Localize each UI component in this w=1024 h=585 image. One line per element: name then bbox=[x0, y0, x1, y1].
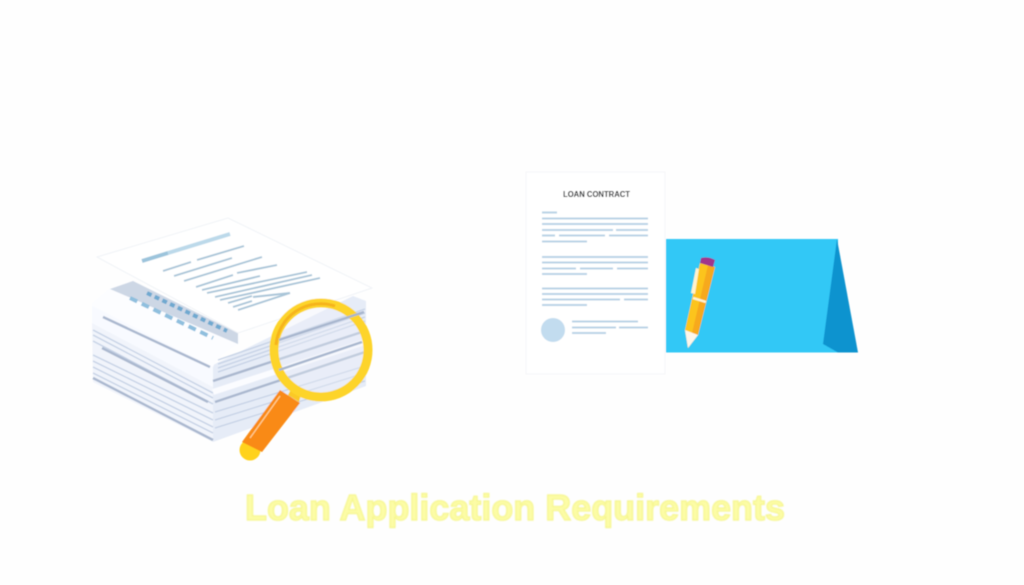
contract page bbox=[526, 172, 665, 374]
magnifying glass bbox=[240, 303, 368, 460]
contract heading: LOAN CONTRACT bbox=[563, 189, 631, 199]
top sheet with text lines bbox=[97, 218, 372, 333]
handle bbox=[240, 385, 302, 460]
second sheet with table header bbox=[92, 281, 240, 367]
lens bbox=[274, 303, 368, 397]
blue folder bbox=[666, 239, 858, 352]
lower paper stack bbox=[92, 296, 366, 442]
contract text lines bbox=[542, 212, 648, 333]
illustration: loan contract and blue folder with pencil bbox=[526, 172, 858, 374]
pencil bbox=[685, 257, 715, 348]
illustration: stack of documents with magnifying glass bbox=[92, 218, 372, 460]
signature seal bbox=[541, 318, 565, 342]
title: Loan Application Requirements bbox=[245, 487, 785, 528]
